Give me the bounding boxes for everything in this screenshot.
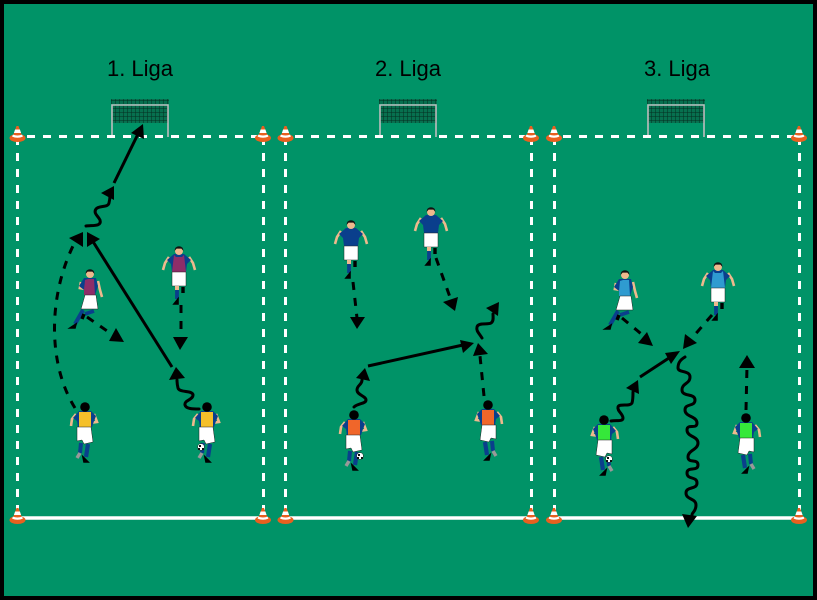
pitch lines bbox=[285, 136, 532, 518]
arrow: shot on goal bbox=[114, 124, 144, 183]
arrow: dashed run curve bbox=[54, 232, 83, 408]
cones bbox=[546, 126, 807, 524]
player: yellow left bbox=[71, 402, 97, 462]
arrow: purple front run bbox=[173, 305, 188, 350]
arrow: pass to striker bbox=[87, 232, 172, 367]
player: purple front bbox=[163, 246, 195, 304]
arrow: light blue side run bbox=[622, 318, 653, 346]
arrow: orange run bbox=[473, 343, 488, 396]
arrow: green run bbox=[739, 355, 755, 410]
player: yellow with ball bbox=[193, 402, 219, 462]
arrow: dribble from green bbox=[611, 380, 639, 421]
arrow: dribble from yellow bbox=[169, 367, 199, 409]
player: blue right bbox=[415, 207, 447, 265]
cones bbox=[10, 126, 271, 524]
player: green with ball bbox=[592, 415, 618, 475]
pitch lines bbox=[17, 136, 264, 518]
player: light blue side bbox=[605, 270, 637, 329]
heading: 2. Liga: 2. Liga bbox=[375, 56, 442, 81]
goal bbox=[379, 99, 437, 137]
arrow: blue left run bbox=[350, 282, 365, 329]
cones bbox=[278, 126, 539, 524]
arrow: pass bbox=[368, 340, 474, 366]
player: blue left bbox=[335, 220, 367, 278]
goal bbox=[647, 99, 705, 137]
heading: 1. Liga: 1. Liga bbox=[107, 56, 174, 81]
arrow: blue right run bbox=[436, 258, 458, 311]
panel: 1. Liga bbox=[10, 56, 271, 524]
arrow: purple side run bbox=[87, 317, 124, 342]
arrow: dribble from orange bbox=[354, 368, 370, 407]
heading: 3. Liga: 3. Liga bbox=[644, 56, 711, 81]
player: green right bbox=[734, 413, 760, 473]
player: purple side bbox=[70, 269, 102, 328]
player: orange right bbox=[476, 400, 502, 460]
arrow: pass bbox=[640, 351, 680, 377]
player: light blue front bbox=[702, 262, 734, 320]
panel: 2. Liga bbox=[278, 56, 539, 524]
pitch lines bbox=[554, 136, 800, 518]
arrow: dribble up right bbox=[477, 302, 499, 338]
arrow: long dribble to baseline bbox=[678, 357, 698, 528]
arrow: dribble up bbox=[86, 186, 114, 226]
goal bbox=[111, 99, 169, 137]
player: orange with ball bbox=[340, 410, 366, 470]
panel: 3. Liga bbox=[546, 56, 807, 528]
arrow: light blue front run bbox=[683, 315, 712, 349]
